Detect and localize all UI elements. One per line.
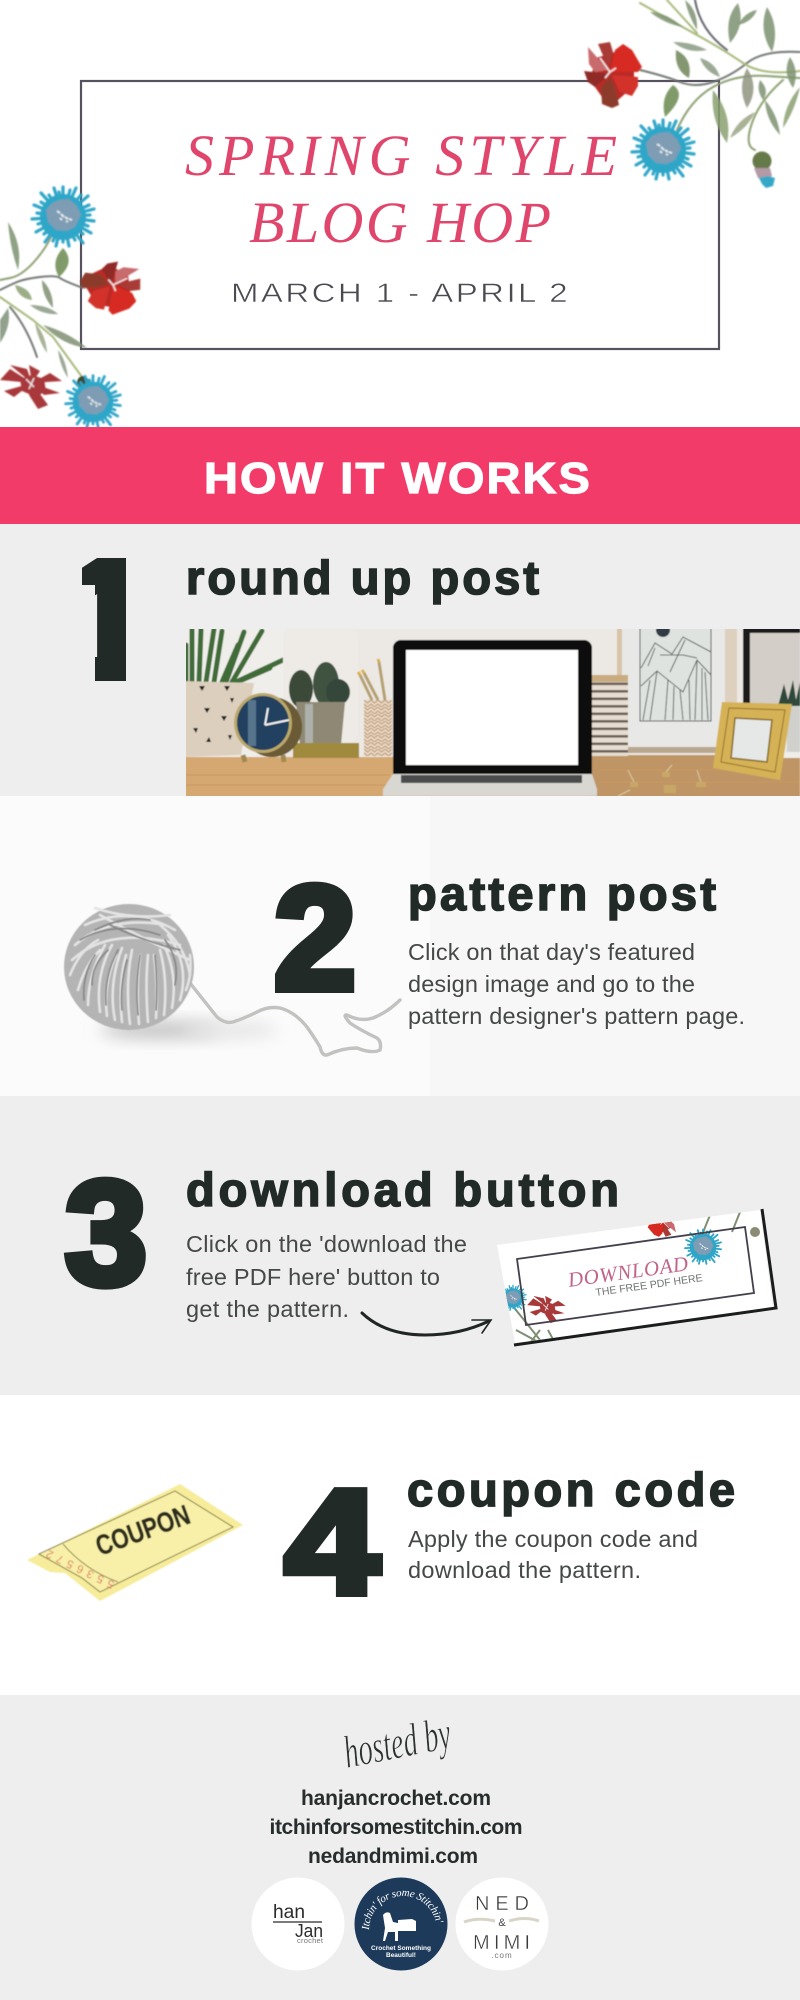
logo: itchin for some stitchin xyxy=(354,1878,448,1970)
logo: han jan crochet xyxy=(252,1878,344,1970)
sewing figure xyxy=(383,1912,416,1941)
title xyxy=(185,123,617,255)
arrow xyxy=(362,1313,491,1335)
striped jar xyxy=(592,675,628,756)
yarn thread xyxy=(190,983,400,1055)
heading band: how it works: HOW IT WORKS xyxy=(204,454,592,503)
coupon ticket image: 5536572 xyxy=(45,1547,116,1590)
panel: step 3 download button xyxy=(0,1096,800,1395)
heading: pattern post: pattern post xyxy=(408,867,716,920)
mountain art xyxy=(617,623,737,755)
logo: han jan crochet: crochet xyxy=(297,1936,324,1945)
panel: step 4 coupon code xyxy=(0,1395,800,1695)
coupon ticket image: COUPON xyxy=(91,1499,194,1562)
table xyxy=(186,756,590,796)
bud xyxy=(752,152,775,188)
desk photo xyxy=(180,623,800,802)
body text: download the pattern. xyxy=(408,1557,641,1583)
logo: han jan crochet: Jan xyxy=(295,1921,323,1941)
body text: get the pattern. xyxy=(186,1296,349,1322)
panel: header xyxy=(0,0,800,428)
hosted by script: hosted by xyxy=(339,1707,455,1778)
logo: ned and mimi xyxy=(456,1878,548,1970)
title: BLOG HOP xyxy=(249,190,551,255)
clock xyxy=(234,693,302,762)
blog urls xyxy=(270,1787,522,1868)
date line: MARCH 1 - APRIL 2 xyxy=(231,278,570,308)
logo: ned and mimi: & xyxy=(498,1917,506,1929)
number 1: 1 xyxy=(63,524,161,720)
number 3: 3 xyxy=(65,1151,147,1316)
blog urls: itchinforsomestitchin.com xyxy=(270,1816,522,1839)
title frame xyxy=(81,81,719,349)
logo: itchin for some stitchin: Itchin' for some Stitchin' xyxy=(362,1890,444,1930)
heading band: how it works xyxy=(0,427,800,524)
blog urls: nedandmimi.com xyxy=(308,1845,478,1868)
cactus xyxy=(289,662,359,758)
heading: round up post: round up post xyxy=(186,551,539,604)
sublabel: THE FREE PDF HERE xyxy=(595,1272,703,1299)
laptop xyxy=(383,640,597,796)
pencil cup xyxy=(358,659,392,756)
heading: download button: download button xyxy=(186,1163,619,1216)
panel: footer hosted by xyxy=(0,1695,800,2000)
body text xyxy=(408,939,745,1029)
download label: DOWNLOAD xyxy=(565,1251,690,1292)
yarn ball photo xyxy=(64,904,400,1055)
body text: Click on the 'download the xyxy=(186,1231,467,1257)
logo: ned and mimi: .com xyxy=(491,1951,513,1960)
body text: Click on that day's featured xyxy=(408,939,695,965)
wall xyxy=(286,629,786,758)
body text xyxy=(186,1231,467,1322)
binder clips xyxy=(630,772,706,793)
title: SPRING STYLE xyxy=(185,123,617,188)
heading: coupon code: coupon code xyxy=(407,1463,735,1516)
logo: itchin for some stitchin: Crochet Something xyxy=(371,1945,431,1952)
glass dome xyxy=(282,657,286,663)
body text: pattern designer's pattern page. xyxy=(408,1003,745,1029)
body text xyxy=(408,1526,698,1583)
panel: step 2 pattern post xyxy=(0,796,800,1096)
body text: free PDF here' button to xyxy=(186,1264,440,1290)
body text: Apply the coupon code and xyxy=(408,1526,698,1552)
floral spray: left xyxy=(0,187,144,428)
dark frame and plant xyxy=(743,625,800,758)
logo: itchin for some stitchin: Beautiful! xyxy=(386,1952,416,1959)
logo: ned and mimi: MIMI xyxy=(473,1932,530,1954)
number 2: 2 xyxy=(274,856,356,1021)
download button image xyxy=(497,1202,776,1345)
body text: design image and go to the xyxy=(408,971,695,997)
floral spray: top right xyxy=(584,0,800,188)
blog urls: hanjancrochet.com xyxy=(301,1787,491,1810)
logo: ned and mimi: NED xyxy=(475,1893,529,1915)
coupon ticket image xyxy=(27,1484,243,1601)
gold picture frame xyxy=(713,702,792,780)
panel: step 1 round up post xyxy=(0,524,800,802)
number 4: 4 xyxy=(285,1459,379,1625)
plant in paper pot xyxy=(180,629,283,757)
logo: han jan crochet: han xyxy=(273,1901,305,1923)
